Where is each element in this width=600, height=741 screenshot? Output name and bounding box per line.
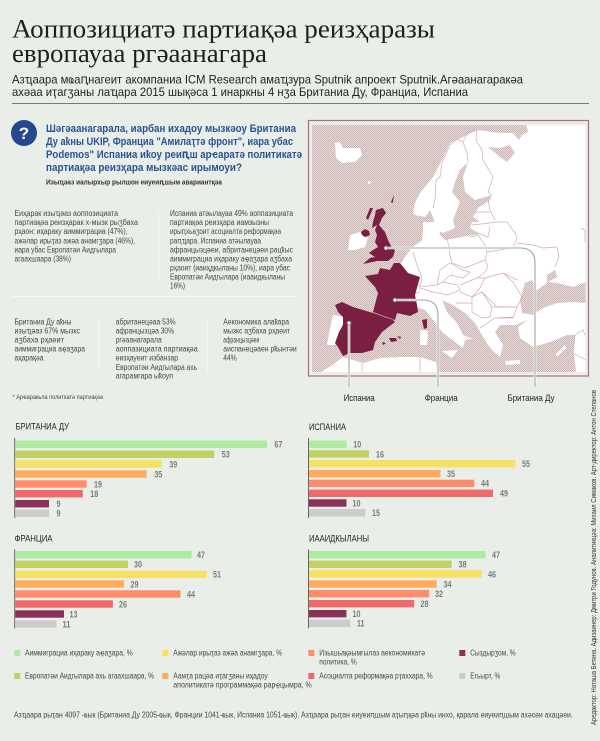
text block: Britain fact bbox=[14, 317, 85, 363]
chart: EU average: 11 bbox=[357, 619, 365, 630]
map of Europe bbox=[308, 120, 588, 376]
legend: Европатәи Аидгылара ахь агаахшаара, % bbox=[25, 672, 154, 680]
text block: economy fact: мызкс аӡбаха рҳаеит bbox=[223, 326, 290, 335]
text block: Europe fact: абританецәаа 53% bbox=[116, 317, 176, 326]
text block: top right: партиақәа реизҳара иамзызны bbox=[170, 218, 269, 227]
legend: Изышьақәымгылаз аекономикатә bbox=[319, 648, 425, 658]
chart: EU average: 47 bbox=[492, 550, 500, 561]
text block: Europe fact: еизҳауеит избанзар bbox=[116, 354, 178, 363]
land: islands bbox=[368, 181, 566, 365]
text block: Britain fact: аиммиграциа аҿаӡара bbox=[14, 345, 85, 354]
credits: Аредактор: Наташа Бетина. Адизаинер: Дмитри Годунов. Аналитикцәа: Михаил Симаков. Арт-директор: Антон Степанов bbox=[591, 390, 598, 725]
chart: France: 29 bbox=[130, 579, 138, 590]
text block: top left: рҳаон: иҳараку аиммиграциа (47%), bbox=[14, 227, 128, 236]
legend: Асоциалта реформақәа рҭаххара, % bbox=[319, 672, 433, 680]
Britain (highlighted) bbox=[361, 195, 395, 264]
text block: Europe fact: ргәаанагарала bbox=[116, 335, 162, 344]
chart: EU average bbox=[308, 534, 500, 630]
legend: Егьырт, % bbox=[470, 672, 500, 680]
land: mainland Europe bbox=[388, 124, 586, 373]
land: Ireland bbox=[348, 232, 368, 250]
text block: top left: иара убас Европатәи Аидгылара bbox=[14, 245, 116, 254]
text block: top left bbox=[14, 209, 138, 263]
text block: top right: Европатәи Аидгылара (иааидкыланы bbox=[170, 272, 285, 281]
text block: top left: Еиҳарак изыҵәаз аоппозициата bbox=[14, 209, 118, 218]
map label: France: Франциа bbox=[425, 392, 458, 403]
legend: Ажәлар ирыҭаз ажәа анамгӡара, % bbox=[173, 648, 282, 658]
chart: Spain: 44 bbox=[481, 479, 489, 490]
sea: White Sea bbox=[488, 145, 515, 162]
chart: EU average: ИААИДКЫЛАНЫ bbox=[309, 534, 369, 544]
country borders bbox=[362, 130, 586, 373]
text block: economy fact: Аекономика алаҟара bbox=[223, 317, 289, 326]
text block: top left: ажәлар ирыҭаз ажәа анамгӡара (46%), bbox=[14, 237, 135, 246]
chart: Spain bbox=[308, 422, 530, 519]
chart: France: 11 bbox=[62, 619, 71, 630]
subtitle: Азҵаара мҩаԥнагеит акомпаниа ICM Research амаҵзура Sputnik апроект Sputnik.Агәаанагаракәа bbox=[12, 72, 523, 86]
chart: EU average: 34 bbox=[444, 579, 452, 590]
text block: top left: партиақәа реизҳарак х-мызк рыӡбаха bbox=[14, 218, 138, 227]
chart: Britain: 53 bbox=[222, 450, 230, 461]
connector: Spain bbox=[347, 321, 351, 387]
text block: top right: Испаниа атәылауаа 49% аоппазициата bbox=[170, 209, 293, 218]
chart: Spain: 49 bbox=[500, 489, 508, 500]
chart: Spain: 55 bbox=[522, 459, 530, 470]
text block: Britain fact: аҳарақәа bbox=[14, 354, 44, 363]
subtitle bbox=[12, 72, 523, 99]
land: Portugal bbox=[327, 315, 343, 345]
text block: top right: 16%) bbox=[170, 281, 185, 290]
question heading: Podemos" Испаниа иҟоу реиԥш арҽаратә политикатә bbox=[46, 149, 302, 161]
text block: top left: агаахшаара (38%) bbox=[14, 254, 71, 263]
sea: Black Sea bbox=[520, 270, 586, 315]
chart: Spain: 16 bbox=[376, 449, 384, 460]
land: Iceland bbox=[335, 142, 362, 163]
map label: Britain: Британиа Ду bbox=[508, 392, 555, 403]
chart: Britain: 19 bbox=[94, 479, 102, 490]
chart: Britain: БРИТАНИА ДУ bbox=[16, 422, 69, 432]
text block: Europe fact: аоппазициата партиақәа bbox=[116, 345, 198, 354]
map label: Spain: Испаниа bbox=[344, 392, 375, 403]
text block: economy fact bbox=[223, 317, 297, 363]
chart: Spain: 15 bbox=[372, 508, 380, 519]
chart: EU average: 38 bbox=[458, 560, 467, 571]
legend: Сыздырӡом, % bbox=[470, 648, 516, 658]
chart: France: 26 bbox=[119, 599, 127, 610]
chart: EU average: 28 bbox=[420, 599, 429, 610]
chart: Spain: ИСПАНИА bbox=[309, 422, 347, 432]
chart: Britain: 39 bbox=[169, 459, 177, 470]
chart: France: 47 bbox=[197, 550, 205, 561]
text block: Britain fact: Британиа Ду аҟны bbox=[14, 317, 72, 326]
legend: Аиммиграциа иҳараку аҿаӡара, % bbox=[25, 648, 133, 658]
chart: Spain: 10 bbox=[352, 498, 360, 509]
connector: Britain bbox=[384, 246, 535, 387]
chart: France: 13 bbox=[70, 609, 78, 620]
text block: Britain fact: изыҵәаз 67% мызкс bbox=[14, 326, 80, 335]
chart: Britain: 18 bbox=[90, 489, 99, 500]
text block: top right: ирыԥхьаӡоит асоциалта реформақәа bbox=[170, 227, 281, 236]
connector: France bbox=[393, 298, 438, 387]
chart: Britain bbox=[14, 422, 282, 520]
text block: top right: аиммиграциа иҳараку аҿаӡара аӡбаха bbox=[170, 254, 292, 263]
France (highlighted) bbox=[365, 263, 420, 320]
text block: Europe fact: агарамгара ыҟоуп bbox=[116, 372, 173, 381]
chart: Britain: 9 bbox=[56, 509, 60, 520]
legend bbox=[14, 648, 516, 690]
subtitle: ахәаа иҭагӡаны лаҵара 2015 шықәса 1 инаркны 4 нӡа Британиа Ду, Франциа, Испаниа bbox=[12, 85, 468, 99]
text block: economy fact: 44% bbox=[223, 354, 237, 363]
chart: EU average: 32 bbox=[435, 589, 443, 600]
legend: аполитикатә программақәа рарҿцымра, % bbox=[173, 680, 312, 690]
title: европауаа ргәаанагара bbox=[12, 38, 267, 68]
sea hatching bbox=[312, 125, 586, 372]
question heading: Ду аҟны UKIP, Франциа "Амилаҭтә фронт", иара убас bbox=[46, 136, 293, 148]
text block: Britain fact: аӡбаха рҳаеит bbox=[14, 335, 64, 344]
title: Аоппозициатә партиақәа реизҳаразы bbox=[12, 14, 435, 44]
text block: Europe fact bbox=[116, 317, 198, 381]
text block: economy fact: аиспанецәаен рҟынтәи bbox=[223, 345, 297, 354]
chart: France: ФРАНЦИА bbox=[14, 534, 53, 544]
icon: question mark: ? bbox=[19, 124, 29, 143]
text block: top right: рҳаоит (иаиҳдкыланы 10%), иара убас bbox=[170, 263, 290, 272]
chart: Spain: 10 bbox=[353, 440, 361, 451]
legend: Аамҭа рацәа иҭагӡаны иҳадоу bbox=[173, 672, 268, 680]
footnote: * Арҽаракьла политкатә партиақәа bbox=[12, 394, 103, 401]
Spain (highlighted) bbox=[335, 302, 401, 356]
question note: Изыҵәаз иалырхыр рылшон еиуеиԥшым авариантқәа bbox=[46, 180, 222, 186]
text block: Europe fact: афранцызцәа 30% bbox=[116, 326, 174, 335]
chart: Britain: 35 bbox=[154, 469, 163, 480]
question heading: партиақәа реизҳара мызкәас ирымоуи? bbox=[46, 162, 242, 174]
chart: Spain: 35 bbox=[447, 469, 455, 480]
text block: economy fact: афранцызцәеи bbox=[223, 335, 259, 344]
text block: top right: раԥҵара. Испаниа атәылауаа bbox=[170, 237, 261, 246]
text block: top right: афранцызцәеи, абританецәеи рацҟыс bbox=[170, 245, 293, 254]
Corsica (highlighted) bbox=[422, 319, 427, 329]
land: North Africa bbox=[320, 357, 437, 373]
question heading: Шәгәаанагарала, иарбан ихадоу мызкәоу Британиа bbox=[46, 123, 297, 135]
chart: France bbox=[14, 534, 221, 630]
title bbox=[12, 14, 435, 68]
text block: Europe fact: Европатәи Аидгылара ахь bbox=[116, 363, 197, 372]
chart: France: 44 bbox=[187, 589, 195, 600]
chart: Britain: 9 bbox=[56, 499, 60, 510]
chart: EU average: 10 bbox=[352, 609, 360, 620]
chart: Britain: 67 bbox=[274, 440, 282, 451]
chart: France: 30 bbox=[134, 560, 142, 571]
text block: top right bbox=[170, 209, 293, 290]
icon: question mark bbox=[11, 120, 37, 146]
legend: политика, % bbox=[319, 658, 357, 666]
question heading bbox=[46, 123, 302, 174]
chart: EU average: 46 bbox=[488, 569, 496, 580]
chart: France: 51 bbox=[213, 570, 221, 581]
